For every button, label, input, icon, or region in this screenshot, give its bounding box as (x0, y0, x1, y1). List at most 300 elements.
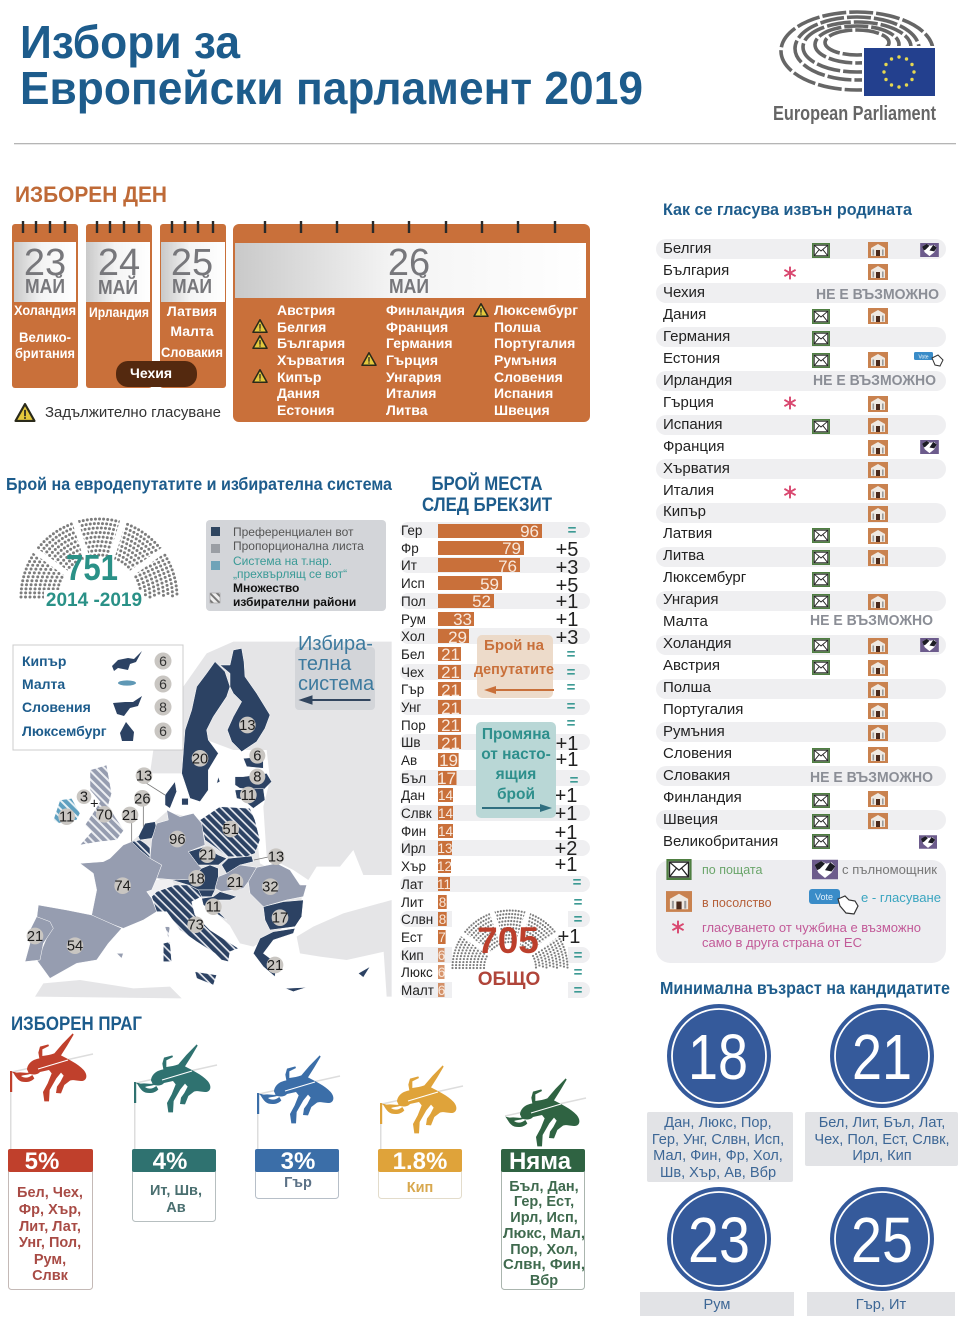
legend: voting methods (656, 860, 946, 963)
bar values: 21 (441, 699, 460, 718)
panel: small states: Малта (22, 676, 65, 692)
seat number badges: 6 (253, 749, 261, 765)
icon: blue high jumper (257, 1055, 340, 1149)
legend: voting methods: само в друга страна от ЕС (702, 936, 862, 950)
table: voting methods by country (656, 239, 946, 850)
bar values: 29 (448, 628, 467, 647)
bar values: 59 (480, 575, 499, 594)
icon: red high jumper (10, 1033, 93, 1149)
list: countries column 2: Литва (386, 402, 428, 418)
country names: Португалия (663, 701, 743, 718)
seat number badges: 11 (241, 788, 256, 804)
bar values: 21 (441, 681, 460, 700)
country labels: Лат (401, 877, 423, 892)
countries: age 25 (807, 1292, 955, 1316)
threshold: 4% (132, 1148, 216, 1222)
country labels: Слвк (401, 806, 432, 821)
heading: seats after Brexit: СЛЕД БРЕКЗИТ (422, 495, 552, 516)
title (20, 16, 643, 114)
country names: Кипър (663, 503, 706, 520)
bar chart: seats per country (400, 522, 590, 999)
country names: Дания (663, 306, 706, 323)
icon: e-voting Estonia: Vote (918, 354, 929, 360)
change versus current seats: = (570, 772, 579, 789)
threshold: 1.8%: 1.8% (393, 1148, 447, 1175)
bar values: 96 (520, 522, 539, 541)
threshold: 5%: 5% (25, 1148, 59, 1175)
country labels: Хол (401, 629, 425, 644)
panel: small states: 8 (159, 699, 167, 715)
countries: age 18: Гер, Унг, Слвн, Исп, (652, 1132, 784, 1148)
countries: age 18: Дан, Люкс, Пор, (664, 1115, 772, 1131)
panel: small states: Словения (22, 699, 91, 715)
seat number badges: 73 (188, 918, 204, 934)
seat number badges: 13 (239, 718, 255, 734)
change versus current seats (555, 522, 583, 999)
badge: age 18 (667, 1004, 771, 1108)
callout: number of MEPs: депутатите (474, 661, 554, 678)
country names: Швеция (663, 811, 718, 828)
seat number badges (27, 717, 288, 974)
threshold: 1.8%: Кип (407, 1180, 433, 1196)
label: Czechia pill: Чехия (130, 365, 172, 381)
total: 705 seats: ОБЩО (478, 969, 540, 990)
callout: number of MEPs: Брой на (484, 637, 545, 654)
country labels: Пол (401, 594, 426, 609)
badge: age 21: 21 (852, 1021, 912, 1093)
not possible labels: НЕ Е ВЪЗМОЖНО (810, 613, 933, 629)
threshold: 3%: Гър (284, 1175, 312, 1191)
threshold: none: Пор, Хол, (510, 1242, 578, 1258)
not possible labels: НЕ Е ВЪЗМОЖНО (810, 770, 933, 786)
countries: age 21: Ирл, Кип (852, 1148, 912, 1164)
country names: Словения (663, 745, 732, 762)
heading: number of MEPs and electoral system: Брой на евродепутатите и избирателна система (6, 474, 392, 494)
threshold: none: Вбр (530, 1273, 558, 1289)
threshold: none: Слвн, Фин, (503, 1257, 585, 1273)
legend: electoral systems (206, 520, 386, 611)
map: MEP seats per country (25, 642, 392, 998)
country names: Италия (663, 482, 714, 499)
seat number badges: 51 (223, 822, 239, 838)
country names: България (663, 262, 729, 279)
callout: number of MEPs (474, 635, 554, 698)
list: countries column 3: Румъния (494, 352, 557, 368)
panel: small states: 6 (159, 723, 167, 739)
threshold: 4%: 4% (153, 1148, 187, 1175)
seat number badges: 54 (67, 939, 83, 955)
legend: voting methods: по пощата (702, 863, 762, 877)
callout: change from current seats: от насто- (481, 746, 551, 763)
title: Европейски парламент 2019 (20, 62, 643, 114)
country labels: Гер (401, 523, 422, 538)
heading: electoral threshold: ИЗБОРЕН ПРАГ (11, 1014, 142, 1035)
seat number badges: 11 (59, 810, 74, 826)
badge: age 23 (667, 1187, 771, 1291)
title: Избори за (20, 16, 240, 68)
legend: electoral systems: „прехвърлящ се вот“ (233, 567, 347, 581)
hemicycle: 751 seats: 2014 -2019 (46, 590, 142, 611)
bar values: 52 (472, 592, 491, 611)
bar values: 21 (441, 663, 460, 682)
icon: yellow high jumper (380, 1065, 463, 1149)
icons: at embassy (868, 242, 888, 829)
badge: age 25: 25 (851, 1204, 913, 1276)
calendar: 23 May (12, 221, 78, 388)
countries: age 21: Бел, Лит, Бъл, Лат, (819, 1115, 945, 1131)
calendar: 24 May: 24 (98, 242, 140, 284)
calendar: 24 May: МАЙ (98, 275, 138, 299)
calendar: 25 May (160, 221, 226, 388)
change: Estonia: +1 (558, 926, 580, 948)
seat number badges: 26 (134, 791, 150, 807)
bar values: 17 (437, 769, 456, 788)
country labels: Хър (401, 859, 426, 874)
callout: electoral system: Избира- (298, 633, 373, 655)
country names: Франция (663, 438, 724, 455)
change versus current seats: +1 (555, 822, 577, 844)
seat number badges: + (90, 796, 99, 812)
icon: green high jumper (505, 1078, 586, 1146)
not possible labels (810, 287, 939, 786)
threshold: none: Люкс, Мал, (503, 1226, 585, 1242)
threshold: none: Ирл, Исп, (510, 1210, 578, 1226)
list: countries column 1: Дания (277, 385, 320, 401)
change versus current seats: = (574, 894, 583, 911)
seat number badges: 13 (136, 769, 152, 785)
country names: Унгария (663, 591, 718, 608)
bar values: 6 (438, 965, 445, 980)
calendar: 25 May: Латвия (167, 303, 217, 319)
legend: voting methods: с пълномощник (842, 863, 938, 877)
leader lines (132, 782, 270, 860)
legend: voting methods: в посолство (702, 896, 772, 910)
calendar: 26 May (233, 221, 590, 422)
change versus current seats: +5 (556, 575, 578, 597)
list: countries column 2 (386, 302, 465, 418)
icons: by proxy (919, 243, 939, 849)
threshold: 4%: Ит, Шв, (150, 1183, 202, 1199)
change versus current seats: = (567, 715, 576, 732)
country labels: Ест (401, 930, 423, 945)
country labels: Ав (401, 753, 417, 768)
legend: electoral systems: Пропорционална листа (233, 539, 364, 553)
not possible labels: НЕ Е ВЪЗМОЖНО (816, 287, 939, 303)
country names: Люксембург (663, 569, 747, 586)
calendar: 23 May: Велико- (19, 329, 71, 345)
seat number badges: 11 (206, 900, 221, 916)
country labels: Ит (401, 558, 417, 573)
threshold: 5%: Унг, Пол, (19, 1235, 81, 1251)
change versus current seats: = (573, 874, 582, 891)
calendar: 23 May: британия (15, 345, 75, 361)
total: 705 seats (452, 906, 568, 1000)
country names: Финландия (663, 789, 742, 806)
threshold: none: Гер, Ест, (514, 1194, 574, 1210)
countries: age 21: Чех, Пол, Ест, Слвк, (814, 1132, 950, 1148)
seat number badges: 13 (268, 850, 284, 866)
callout: change from current seats: Промяна (482, 726, 551, 743)
list: countries column 3: Полша (494, 319, 541, 335)
country labels: Бъл (401, 771, 426, 786)
list: countries column 1: Естония (277, 402, 335, 418)
list: countries column 2: Гърция (386, 352, 438, 368)
country labels: Фр (401, 541, 419, 556)
country names: Белгия (663, 240, 711, 257)
change versus current seats: +2 (555, 838, 577, 860)
seat number badges: 70 (96, 807, 112, 823)
countries: age 25: Гър, Ит (856, 1297, 907, 1313)
logo: European Parliament (773, 12, 937, 125)
badge: age 18: 18 (688, 1021, 748, 1093)
callout: electoral system: система (298, 673, 375, 695)
country labels: Малт (401, 983, 434, 998)
country names: Холандия (663, 635, 731, 652)
change versus current seats: = (567, 664, 576, 681)
threshold: none (501, 1148, 585, 1290)
legend: voting methods: е - гласуване (861, 891, 941, 905)
country labels: Люкс (401, 965, 433, 980)
threshold: 5% (8, 1148, 93, 1290)
bar values: 13 (437, 841, 453, 856)
seat number badges: 21 (267, 958, 283, 974)
country names: Австрия (663, 657, 720, 674)
legend: electoral systems: избирателни райони (233, 595, 356, 609)
map shapes: countries (25, 648, 370, 992)
list: countries column 3: Швеция (494, 402, 550, 418)
threshold: 3% (255, 1148, 339, 1198)
not possible labels: НЕ Е ВЪЗМОЖНО (813, 373, 936, 389)
heading: election day: ИЗБОРЕН ДЕН (15, 182, 167, 207)
list: countries column 1: Хърватия (277, 352, 345, 368)
calendar: 24 May (86, 221, 152, 388)
heading: seats after Brexit (422, 473, 552, 516)
change versus current seats: +5 (556, 539, 578, 561)
bar values: 8 (439, 912, 446, 927)
list: countries column 3: Люксембург (494, 302, 578, 318)
calendar: 23 May: МАЙ (25, 274, 65, 298)
bar values: 14 (438, 806, 453, 821)
icons: by post (813, 244, 829, 848)
list: countries column 2: Германия (386, 335, 453, 351)
legend: electoral systems: Система на т.нар. (233, 554, 332, 568)
callout: change from current seats: брой (497, 786, 535, 803)
threshold: 1.8% (378, 1148, 462, 1198)
country names: Чехия (663, 284, 705, 301)
seat number badges: 21 (27, 929, 43, 945)
country labels: Рум (401, 612, 426, 627)
country names: Испания (663, 416, 723, 433)
threshold: 3%: 3% (281, 1148, 315, 1175)
change versus current seats: = (574, 911, 583, 928)
threshold: 5%: Слвк (32, 1268, 69, 1284)
calendar: 24 May: Ирландия (89, 304, 149, 320)
country labels: Ирл (401, 841, 426, 856)
change versus current seats: +3 (556, 627, 578, 649)
calendar: 26 May: МАЙ (389, 274, 429, 298)
list: countries column 2: Италия (386, 385, 436, 401)
badge: age 25 (830, 1187, 934, 1291)
change versus current seats: +3 (556, 557, 578, 579)
threshold: 4%: Ав (166, 1200, 186, 1216)
bar values: 6 (438, 983, 445, 998)
panel: small states (13, 645, 183, 750)
country labels: Исп (401, 576, 425, 591)
seat number badges: 21 (122, 808, 138, 824)
list: countries column 1: Белгия (277, 319, 326, 335)
bar values: 7 (438, 930, 446, 945)
badge: age 23: 23 (688, 1204, 750, 1276)
bar values: 76 (498, 557, 517, 576)
seat number badges: 74 (115, 879, 131, 895)
bar values: 11 (437, 877, 451, 892)
countries: age 23 (640, 1292, 794, 1316)
country labels: Кип (401, 948, 424, 963)
country names: Гърция (663, 394, 714, 411)
bar values: 19 (439, 751, 458, 770)
country names: Хърватия (663, 460, 730, 477)
seat number badges: 8 (253, 770, 261, 786)
calendar: 23 May: 23 (24, 242, 66, 284)
calendar: 25 May: Малта (170, 323, 214, 339)
list: countries column 1: България (277, 335, 345, 351)
change versus current seats: = (567, 646, 576, 663)
country labels: Лит (401, 895, 424, 910)
threshold: 5%: Рум, (34, 1252, 66, 1268)
callout: electoral system: телна (298, 653, 352, 675)
change versus current seats: +1 (555, 785, 577, 807)
country names: Ирландия (663, 372, 732, 389)
threshold: none: Няма (509, 1148, 572, 1175)
legend: electoral systems: Преференциален вот (233, 525, 354, 539)
country names: Словакия (663, 767, 730, 784)
country labels: Фин (401, 824, 426, 839)
badge: age 21 (830, 1004, 934, 1108)
change versus current seats: +1 (555, 803, 577, 825)
country labels: Слвн (401, 912, 433, 927)
list: countries column 3: Португалия (494, 335, 575, 351)
icons: only from another EU country (784, 267, 796, 498)
hemicycle: 751 seats (21, 518, 177, 611)
change versus current seats: +1 (555, 854, 577, 876)
callout: change from current seats (476, 722, 556, 818)
threshold: 5%: Бел, Чех, (17, 1185, 83, 1201)
countries: age 18: Шв, Хър, Ав, Вбр (660, 1165, 776, 1181)
list: countries column 1: Кипър (277, 369, 321, 385)
seat number badges: 21 (227, 875, 243, 891)
country names: Румъния (663, 723, 725, 740)
threshold: 5%: Лит, Лат, (19, 1219, 81, 1235)
bar values: 21 (441, 734, 460, 753)
bar values: 79 (502, 539, 521, 558)
icons: compulsory voting markers (253, 304, 488, 382)
bar values: 21 (441, 645, 460, 664)
panel: small states: 6 (159, 676, 167, 692)
panel: small states: 6 (159, 653, 167, 669)
panel: small states: Кипър (22, 653, 66, 669)
country names: Латвия (663, 525, 712, 542)
countries: age 18: Мал, Фин, Фр, Хол, (653, 1148, 783, 1164)
heading: voting from abroad: Как се гласува извън родината (663, 200, 913, 219)
calendar: 25 May: 25 (171, 242, 213, 284)
legend: voting methods: Vote (815, 892, 833, 902)
list: countries column 1 (277, 302, 345, 418)
country labels: Шв (401, 735, 421, 750)
change versus current seats: = (568, 522, 577, 539)
change versus current seats: +1 (556, 609, 578, 631)
calendar: 23 May: Холандия (14, 302, 76, 318)
country names (663, 240, 778, 850)
bars (438, 524, 542, 997)
calendar: 26 May: 26 (388, 242, 430, 284)
change versus current seats: = (567, 698, 576, 715)
countries: age 23: Рум (704, 1297, 730, 1313)
callout: change from current seats: ящия (496, 766, 536, 783)
list: countries column 3: Испания (494, 385, 553, 401)
country names: Литва (663, 547, 705, 564)
change versus current seats: +1 (556, 733, 578, 755)
list: countries column 1: Австрия (277, 302, 335, 318)
country labels: Дан (401, 788, 425, 803)
list: countries column 2: Финландия (386, 302, 465, 318)
bar values: 12 (437, 859, 452, 874)
countries: age 21 (805, 1112, 958, 1166)
change versus current seats: +1 (556, 749, 578, 771)
list: countries column 2: Унгария (386, 369, 442, 385)
icon: teal high jumper (134, 1044, 217, 1149)
change versus current seats: = (574, 947, 583, 964)
change versus current seats: +1 (556, 591, 578, 613)
panel: small states: Люксембург (22, 723, 107, 739)
country labels (401, 523, 434, 998)
seat number badges: 32 (262, 880, 278, 896)
bar values: 14 (438, 824, 453, 839)
bar values: 14 (438, 788, 453, 803)
hemicycle: 751 seats: 751 (66, 547, 118, 588)
change versus current seats: = (567, 679, 576, 696)
seat number badges: 20 (192, 751, 208, 767)
callout: electoral system (295, 633, 375, 710)
country labels: Гър (401, 682, 424, 697)
seat number badges: 3 (80, 790, 88, 806)
seat number badges: 18 (189, 871, 205, 887)
calendar: 25 May: МАЙ (172, 274, 212, 298)
change versus current seats: = (574, 982, 583, 999)
country labels: Чех (401, 665, 424, 680)
calendar: 25 May: Словакия (161, 344, 223, 360)
country names: Малта (663, 613, 708, 630)
threshold: none: Бъл, Дан, (509, 1179, 579, 1195)
label: Czechia pill (116, 361, 197, 387)
country names: Естония (663, 350, 720, 367)
bar values: 33 (453, 610, 472, 629)
list: countries column 2: Франция (386, 319, 448, 335)
list: countries column 3: Словения (494, 369, 563, 385)
bar values (437, 522, 539, 998)
seat number badges: 21 (199, 848, 215, 864)
icon: e-voting Estonia (914, 352, 943, 366)
seat number badges: 96 (169, 832, 185, 848)
countries: age 18 (647, 1112, 793, 1182)
list: countries column 3 (494, 302, 578, 418)
legend: compulsory voting: Задължително гласуване (45, 405, 221, 421)
legend: electoral systems: Множество (233, 581, 299, 595)
change versus current seats: = (574, 964, 583, 981)
country labels: Пор (401, 718, 426, 733)
legend: voting methods: гласуването от чужбина е възможно (702, 921, 921, 935)
seat number badges: 17 (272, 911, 288, 927)
country names: Германия (663, 328, 730, 345)
